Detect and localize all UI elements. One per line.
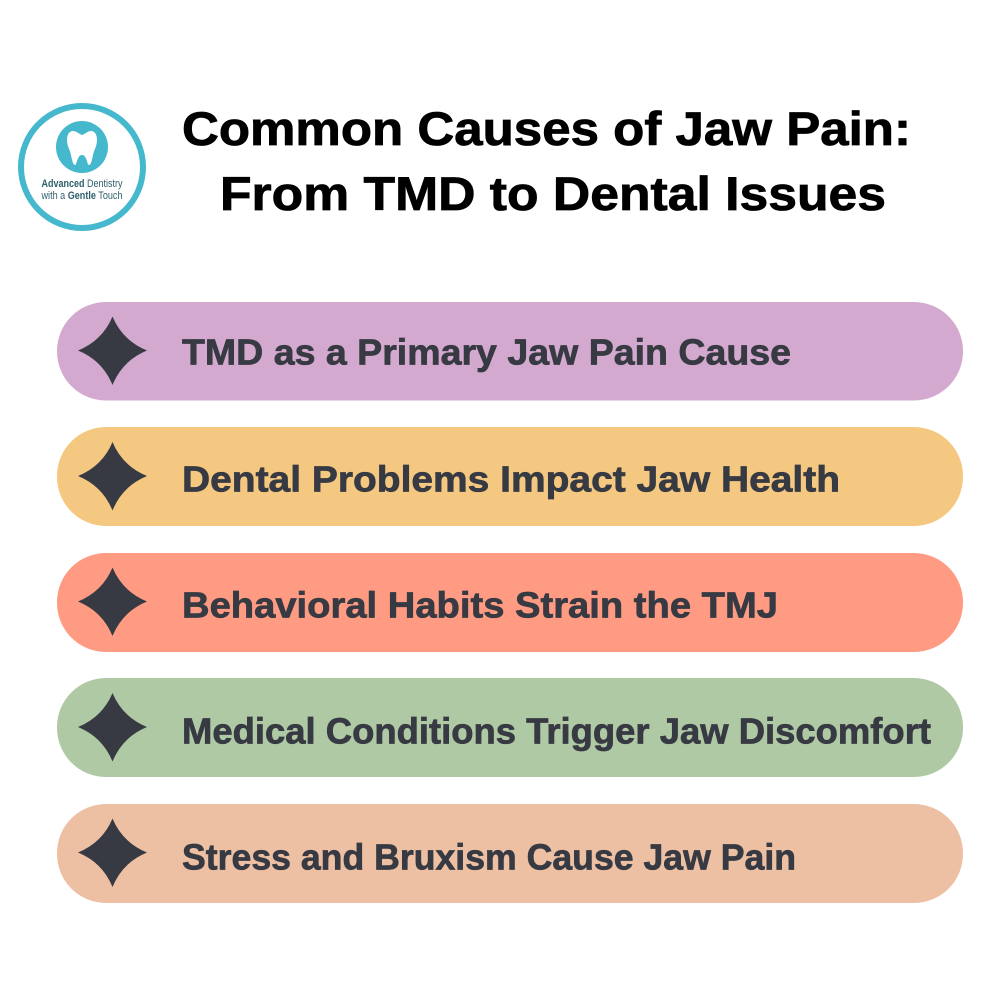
label: Dental Problems Impact Jaw Health — [182, 458, 840, 500]
icon: star — [78, 693, 147, 762]
panel: stress and bruxism — [57, 804, 963, 903]
panel: behavioral habits — [57, 553, 963, 652]
title — [182, 102, 911, 220]
label: Behavioral Habits Strain the TMJ — [182, 584, 778, 626]
logo: Advanced Dentistry with a Gentle Touch — [21, 106, 143, 228]
title: From TMD to Dental Issues — [220, 167, 886, 220]
label: Stress and Bruxism Cause Jaw Pain — [182, 836, 796, 878]
icon: star — [78, 568, 147, 636]
logo text: with a Gentle Touch — [41, 190, 123, 202]
icon: star — [78, 316, 147, 385]
panel: TMD as a primary cause — [57, 302, 963, 400]
icon: star — [78, 442, 147, 510]
title: Common Causes of Jaw Pain: — [182, 102, 911, 155]
logo text — [41, 178, 123, 202]
icon: star — [78, 818, 147, 887]
logo text: Advanced Dentistry — [42, 178, 123, 190]
panel: medical conditions — [57, 678, 963, 777]
icon: tooth — [56, 121, 108, 173]
label: Medical Conditions Trigger Jaw Discomfort — [182, 710, 931, 752]
panel: dental problems — [57, 427, 963, 526]
label: TMD as a Primary Jaw Pain Cause — [182, 332, 791, 372]
